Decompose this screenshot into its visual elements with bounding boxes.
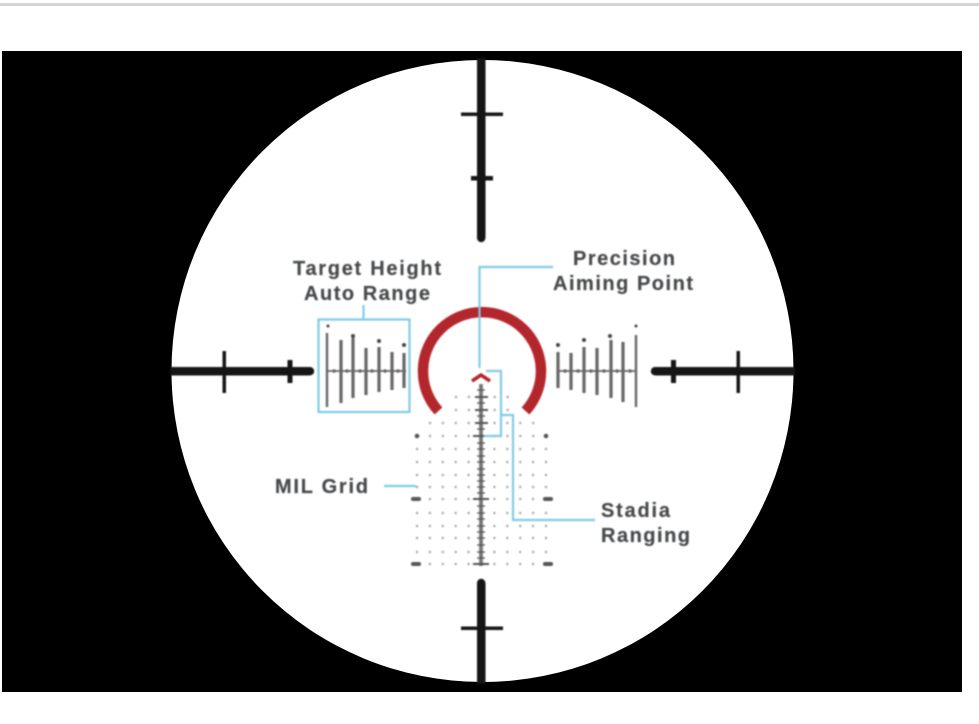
reticle artwork xyxy=(170,58,795,684)
label: precision aiming point: Precision xyxy=(573,248,675,270)
label: target height auto range: Target Height xyxy=(293,258,441,280)
label: precision aiming point: Aiming Point xyxy=(553,273,693,295)
red precision aiming chevron xyxy=(472,375,490,381)
label: target height auto range xyxy=(293,258,441,305)
callout: stadia ranging lines xyxy=(484,371,595,520)
callout: MIL grid line xyxy=(384,485,416,487)
MIL grid edge marks xyxy=(411,434,553,566)
red horseshoe arc xyxy=(423,312,541,411)
label: target height auto range: Auto Range xyxy=(304,283,430,305)
label: MIL grid: MIL Grid xyxy=(275,476,368,498)
right target height scale xyxy=(556,324,638,407)
left target height scale xyxy=(326,324,406,407)
center stadia ladder xyxy=(473,384,489,566)
top grey rule xyxy=(0,3,979,6)
label: precision aiming point xyxy=(553,248,693,295)
label: stadia ranging: Ranging xyxy=(601,525,690,547)
callout: precision aiming point line xyxy=(480,267,553,368)
label: stadia ranging xyxy=(601,500,690,547)
scope view circle xyxy=(172,60,794,682)
callout: target height box xyxy=(318,305,410,412)
crosshair posts xyxy=(170,58,795,684)
label: stadia ranging: Stadia xyxy=(601,500,671,522)
MIL grid dots xyxy=(416,397,548,564)
